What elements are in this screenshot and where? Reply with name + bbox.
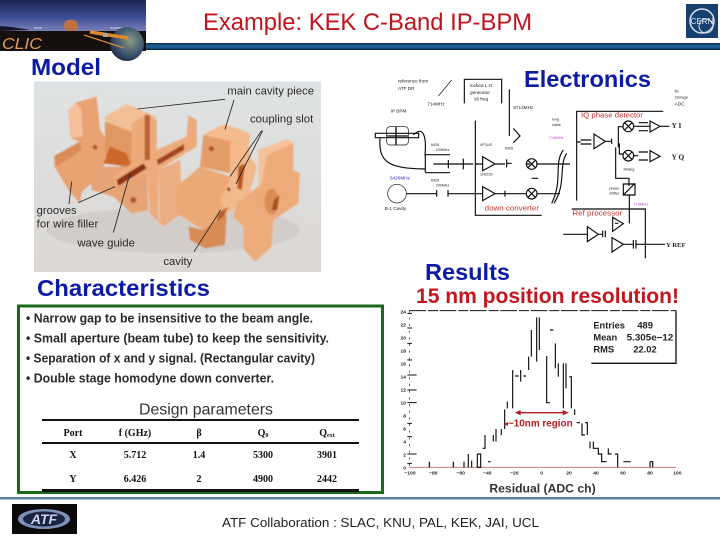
diagram labels: B-1 Cavity xyxy=(385,206,407,211)
electronics block diagram: Ref processor xyxy=(572,209,623,218)
diagram labels xyxy=(385,79,689,211)
chart stats box text: 5.305e−12 xyxy=(627,332,673,342)
icon: ATF logo: ATF xyxy=(30,511,58,527)
chart frame xyxy=(407,311,676,467)
y axis labels: 12 xyxy=(400,388,406,394)
design parameters table: 2442 xyxy=(317,474,337,485)
photo annotation labels: wave guide xyxy=(76,238,135,250)
y axis labels: 4 xyxy=(403,440,406,446)
results headline: 15 nm position resolution! xyxy=(416,285,679,308)
histogram bars xyxy=(429,317,653,467)
centre-left block xyxy=(105,104,157,132)
diagram labels: ATF DR xyxy=(398,86,415,91)
slotted plate xyxy=(113,113,197,227)
photo annotation labels: main cavity piece xyxy=(227,85,314,97)
design parameters table: Q xyxy=(258,428,265,439)
electronics block diagram: IQ phase detector xyxy=(581,111,643,120)
characteristics bullet list: • Separation of x and y signal. (Rectangular cavity) xyxy=(26,352,315,366)
diagram labels: 1HCDD xyxy=(480,172,493,176)
design parameters table: 2 xyxy=(196,474,202,485)
design parameters table: 1.4 xyxy=(193,450,205,461)
electronics block diagram: down converter xyxy=(485,204,539,213)
heading: Model: Model xyxy=(31,54,101,80)
chart stats box text: Mean xyxy=(593,332,617,342)
diagram labels: 714MHz xyxy=(427,102,445,107)
electronics block diagram: Y I xyxy=(672,121,682,130)
y axis labels: 16 xyxy=(400,362,406,368)
y axis labels: 0 xyxy=(403,466,406,472)
design parameters table: f (GHz) xyxy=(119,428,151,439)
diagram labels: storage xyxy=(675,95,689,100)
y axis labels: 14 xyxy=(400,375,406,381)
diagram labels: 6426MHz xyxy=(390,175,411,180)
y axis labels: 22 xyxy=(400,323,406,329)
x axis labels: −40 xyxy=(483,471,492,477)
diagram labels: to xyxy=(675,88,679,93)
electronics block diagram xyxy=(375,79,689,258)
diagram labels: long xyxy=(552,118,559,122)
y axis labels: 2 xyxy=(403,453,406,459)
diagram labels: IP BPM xyxy=(391,109,406,114)
panel: characteristics box xyxy=(18,306,382,492)
header rule xyxy=(146,43,720,50)
photo: copper cavity model xyxy=(34,81,321,272)
diagram labels: generator xyxy=(470,90,490,95)
characteristics bullet list: • Small aperture (beam tube) to keep the sensitivity. xyxy=(26,332,329,346)
x axis labels: −60 xyxy=(456,471,465,477)
heading: Electronics: Electronics xyxy=(524,66,651,92)
chart stats box text: Entries xyxy=(593,321,625,331)
design parameters table: X xyxy=(69,450,77,461)
x axis labels: 0 xyxy=(540,471,543,477)
design parameters table: 5300 xyxy=(253,450,273,461)
right main block xyxy=(205,124,250,152)
header banner: CLIC image xyxy=(0,0,146,61)
design parameters table: 6.426 xyxy=(124,474,146,485)
x axis labels: 100 xyxy=(673,471,682,477)
diagram labels: 6426 xyxy=(431,143,439,147)
design parameters table: 0 xyxy=(265,433,268,439)
table heading: design parameters: Design parameters xyxy=(139,402,273,418)
design parameters table: ext xyxy=(327,433,335,439)
electronics block diagram: 714MHz xyxy=(549,135,564,140)
x axis labels: −100 xyxy=(404,471,416,477)
photo annotation labels: grooves xyxy=(37,205,77,217)
design parameters table: β xyxy=(196,428,202,439)
design parameters table: 4900 xyxy=(253,474,273,485)
electronics block diagram: Y Q xyxy=(672,153,685,162)
footer credits: ATF Collaboration : SLAC, KNU, PAL, KEK, JAI, UCL xyxy=(222,515,539,530)
histogram chart xyxy=(400,309,682,496)
diagram labels: shifter xyxy=(609,191,620,195)
electronics block diagram: Y REF xyxy=(666,242,686,249)
right cross plate xyxy=(233,139,300,262)
photo annotation labels: coupling slot xyxy=(250,113,313,125)
photo annotation labels: for wire filler xyxy=(37,218,99,230)
design parameters table: Port xyxy=(64,428,83,439)
diagram labels: 5712MHz xyxy=(513,105,534,110)
design parameters table: 3901 xyxy=(317,450,337,461)
y axis labels: 18 xyxy=(400,349,406,355)
electronics block diagram: 714MHz xyxy=(633,202,648,207)
chart annotation: 10nm region: ~10nm region xyxy=(508,419,573,430)
diagram labels: 6426 xyxy=(505,146,513,150)
photo annotation labels xyxy=(37,85,314,268)
diagram labels: x8 freq xyxy=(474,97,489,102)
title: Example: KEK C-Band IP-BPM xyxy=(203,9,532,36)
x axis labels: 40 xyxy=(593,471,599,477)
icon: ATF logo xyxy=(12,504,77,534)
chart stats box text: 22.02 xyxy=(633,344,657,354)
x axis labels xyxy=(404,471,682,477)
design parameters table: Q xyxy=(319,428,327,439)
photo annotation labels: cavity xyxy=(163,256,193,268)
diagram labels: cable xyxy=(552,123,561,127)
chart stats box text xyxy=(593,321,673,354)
chart stats box text: 489 xyxy=(637,321,653,331)
diagram labels: phase xyxy=(609,187,619,191)
y axis labels: 10 xyxy=(400,400,406,406)
heading: Characteristics: Characteristics xyxy=(37,275,210,301)
design parameters table xyxy=(42,419,359,492)
y axis labels: 6 xyxy=(403,427,406,433)
CLIC logo text: CLIC xyxy=(2,36,43,53)
icon: CERN logo: CERN xyxy=(691,17,714,26)
y axis labels: 24 xyxy=(400,309,406,315)
diagram labels: → 200MHz xyxy=(431,184,449,188)
x axis labels: 60 xyxy=(620,471,626,477)
footer rule xyxy=(0,497,720,500)
y axis labels xyxy=(400,309,406,472)
left cross plate xyxy=(54,97,107,203)
x axis labels: −20 xyxy=(510,471,519,477)
heading: Results: Results xyxy=(425,259,510,285)
design parameters table: Y xyxy=(69,474,77,485)
y axis labels: 8 xyxy=(403,414,406,420)
diagram labels: ADC xyxy=(675,102,685,107)
x axis labels: −80 xyxy=(429,471,438,477)
photo annotation lines xyxy=(69,99,263,252)
chart annotation: 10nm region xyxy=(504,410,573,430)
design parameters table: 5.712 xyxy=(124,450,146,461)
diagram labels: VP1US xyxy=(480,143,493,147)
icon: CERN logo xyxy=(686,4,718,38)
diagram labels: reference from xyxy=(398,79,428,84)
x axis labels: 20 xyxy=(566,471,572,477)
diagram labels: locked L.O. xyxy=(470,83,494,88)
characteristics bullet list xyxy=(26,312,329,386)
diagram labels: 90deg xyxy=(623,166,634,171)
x axis labels: 80 xyxy=(647,471,653,477)
characteristics bullet list: • Double stage homodyne down converter. xyxy=(26,372,274,386)
characteristics bullet list: • Narrow gap to be insensitive to the beam angle. xyxy=(26,312,313,326)
diagram labels: 6426 xyxy=(431,179,439,183)
x axis title: Residual (ADC ch) xyxy=(489,482,596,496)
y axis labels: 20 xyxy=(400,335,406,341)
diagram labels: → 200MHz xyxy=(431,148,449,152)
chart stats box text: RMS xyxy=(593,344,614,354)
